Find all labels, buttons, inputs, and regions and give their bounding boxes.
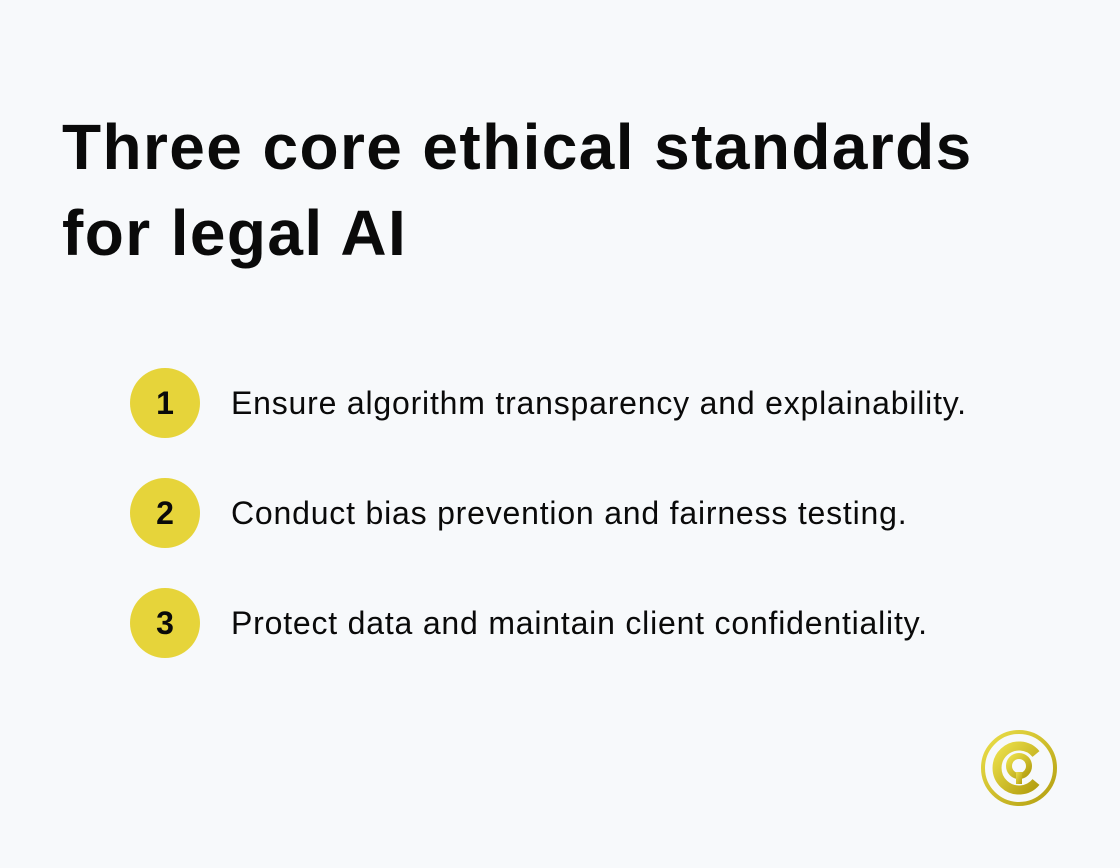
number badge 1 — [130, 368, 200, 438]
number badge 2: 2 — [156, 495, 174, 531]
text 1: Ensure algorithm transparency and explainability. — [231, 385, 967, 421]
item 1 — [130, 368, 967, 438]
title — [62, 111, 973, 269]
number badge 1: 1 — [156, 385, 174, 421]
title: for legal AI — [62, 197, 407, 269]
icon: logo — [981, 730, 1057, 806]
item 2 — [130, 478, 907, 548]
text 2: Conduct bias prevention and fairness testing. — [231, 495, 907, 531]
number badge 2 — [130, 478, 200, 548]
text 3: Protect data and maintain client confidentiality. — [231, 605, 928, 641]
number badge 3: 3 — [156, 605, 174, 641]
item 3 — [130, 588, 928, 658]
number badge 3 — [130, 588, 200, 658]
title: Three core ethical standards — [62, 111, 973, 183]
